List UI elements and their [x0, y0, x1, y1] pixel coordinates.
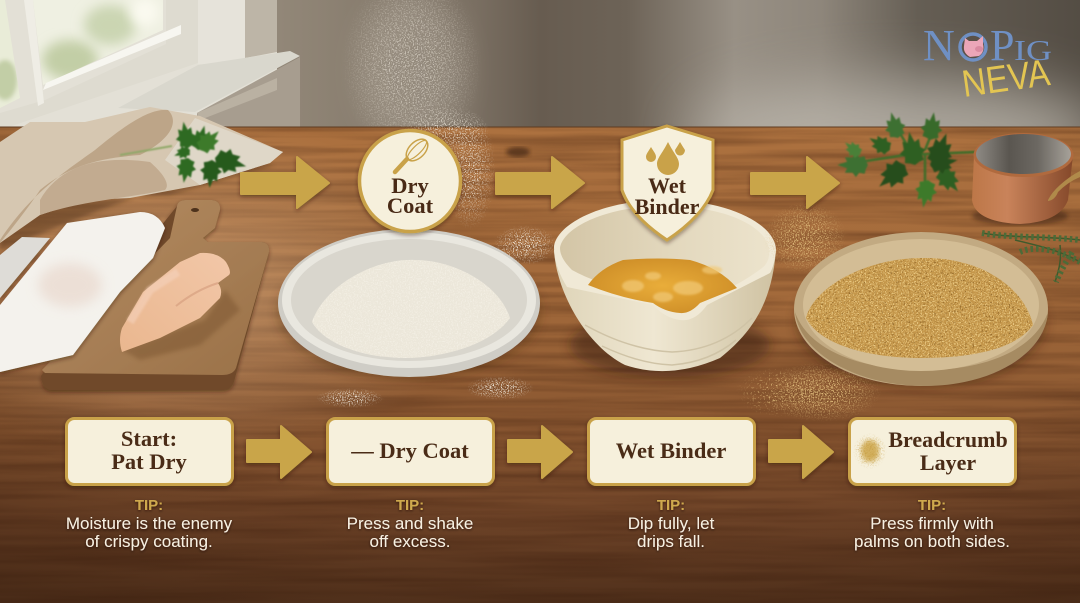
tip 4: Press firmly with: [870, 514, 994, 533]
scattered breadcrumbs: [735, 202, 882, 422]
tip 1: Moisture is the enemy: [66, 514, 233, 533]
badge label: dry coat: Dry: [391, 173, 429, 198]
bowl of flour: [278, 229, 540, 377]
badge label: dry coat: Coat: [387, 193, 434, 218]
tip 4: palms on both sides.: [854, 532, 1010, 551]
tip 1: [66, 497, 233, 551]
arrow: top 3: [751, 157, 839, 208]
badge label: wet binder: Binder: [635, 194, 700, 219]
logo: No Pig Neva: [923, 21, 1053, 106]
tip 1: of crispy coating.: [85, 532, 213, 551]
linen towel: [0, 107, 283, 250]
step box: start pat dry: Start:: [121, 426, 177, 451]
step box: breadcrumb layer: Breadcrumb: [888, 427, 1008, 452]
arrow: bottom 1: [247, 426, 311, 478]
tip 3: TIP:: [657, 497, 685, 514]
egg bowl: [554, 200, 776, 377]
step box: wet binder: [588, 418, 754, 484]
arrow: bottom 2: [508, 426, 572, 478]
tip 2: off excess.: [370, 532, 450, 551]
flour spill: [316, 106, 557, 408]
tip 1: TIP:: [135, 497, 163, 514]
tip 2: [347, 497, 473, 551]
chicken breast: [120, 253, 240, 360]
parsley left: [120, 120, 249, 189]
tip 3: drips fall.: [637, 532, 705, 551]
window with sill: [0, 0, 300, 135]
logo: No Pig Neva: IG: [1014, 36, 1052, 67]
step box: start pat dry: [66, 418, 232, 484]
logo pig head: [960, 34, 986, 60]
tip 2: TIP:: [396, 497, 424, 514]
arrow: top 2: [496, 157, 584, 208]
flour dust plume: [342, 0, 482, 160]
step box: breadcrumb layer: Layer: [920, 450, 976, 475]
tip 3: Dip fully, let: [628, 514, 715, 533]
thyme sprig: [982, 233, 1080, 282]
tip 4: TIP:: [918, 497, 946, 514]
arrow: bottom 3: [769, 426, 833, 478]
paper towel: [0, 212, 165, 372]
tip 4: [854, 497, 1010, 551]
tip 3: [628, 497, 715, 551]
badge label: wet binder: Wet: [648, 173, 687, 198]
cutting board: [41, 200, 269, 390]
icon: droplets: [646, 142, 685, 175]
logo: No Pig Neva: N: [923, 21, 955, 70]
background: kitchen wall: [0, 0, 1080, 190]
parsley right: [837, 110, 975, 209]
logo: No Pig Neva: P: [990, 21, 1014, 70]
step box: dry coat: [328, 418, 494, 484]
logo: No Pig Neva: NEVA: [959, 52, 1053, 106]
step box: dry coat: — Dry Coat: [350, 438, 469, 463]
step box: start pat dry: Pat Dry: [111, 449, 188, 474]
arrow: top 1: [241, 157, 329, 208]
step box: wet binder: Wet Binder: [616, 438, 726, 463]
badge: dry coat: [360, 130, 460, 232]
tip 2: Press and shake: [347, 514, 473, 533]
badge: wet binder: [622, 126, 713, 240]
step box: breadcrumb layer: [850, 418, 1016, 484]
icon: whisk: [395, 135, 432, 172]
breadcrumb bowl: [794, 232, 1048, 386]
icon: crumbs: [853, 433, 887, 469]
copper pot: [972, 133, 1080, 225]
